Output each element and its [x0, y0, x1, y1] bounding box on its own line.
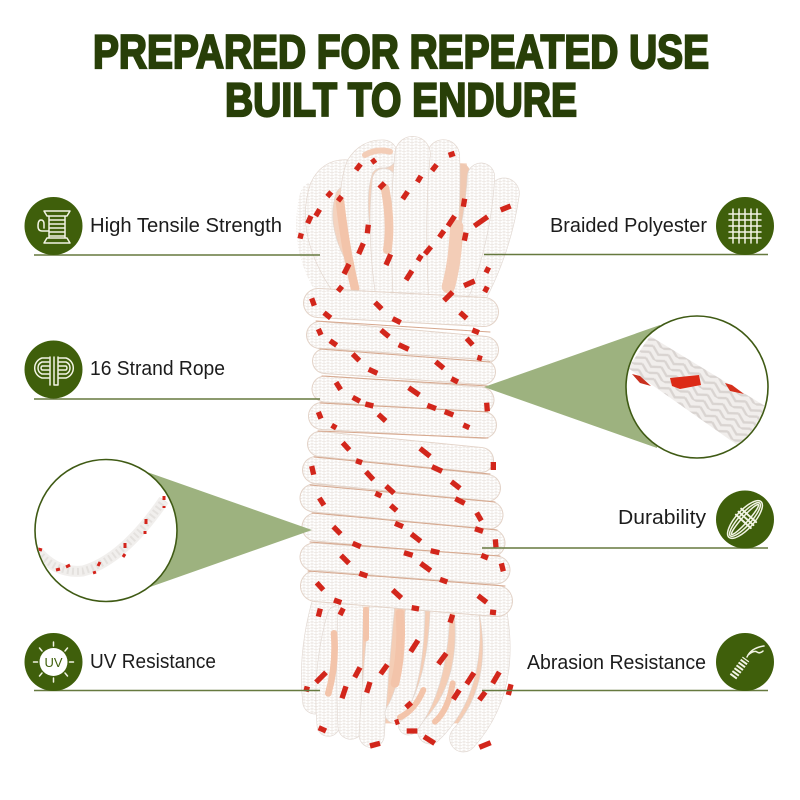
rope: wrapped coil bands [308, 303, 505, 601]
title [93, 25, 709, 126]
feature: durability [618, 490, 774, 548]
label: Abrasion Resistance [527, 652, 706, 674]
icon: UV sun: UV [44, 655, 63, 670]
feature: abrasion resistance [527, 633, 774, 691]
leader lines [34, 254, 768, 690]
callout: zoom wedge right [484, 325, 660, 448]
callout: zoom wedge left [147, 472, 312, 587]
feature: high tensile strength [24, 197, 282, 255]
icon: UV sun [24, 633, 82, 691]
magnified rope strand [630, 336, 764, 444]
label: UV Resistance [90, 651, 216, 673]
label: Braided Polyester [550, 215, 707, 237]
rope: red tracer marks on lower strands [304, 443, 511, 747]
feature: UV resistance [24, 633, 216, 691]
callout: coil length detail circle [35, 460, 177, 602]
rope: red tracer marks on upper strands [300, 153, 511, 428]
icon: bundled cord [716, 490, 774, 548]
magnified thin rope [38, 496, 164, 573]
rope: bottom loops [314, 607, 500, 738]
rope: top loops [311, 151, 504, 297]
icon: rope coil [24, 340, 82, 398]
feature: 16 strand rope [24, 340, 225, 398]
icon: frayed rope [716, 633, 774, 691]
rope coil photo [300, 151, 511, 747]
title: BUILT TO ENDURE [225, 73, 577, 126]
callout: magnified braid detail circle [626, 316, 775, 458]
feature: braided polyester [550, 197, 774, 255]
label: High Tensile Strength [90, 215, 282, 237]
icon: woven fabric [716, 197, 774, 255]
icon: thread spool [24, 197, 82, 255]
label: 16 Strand Rope [90, 358, 225, 380]
label: Durability [618, 507, 706, 529]
